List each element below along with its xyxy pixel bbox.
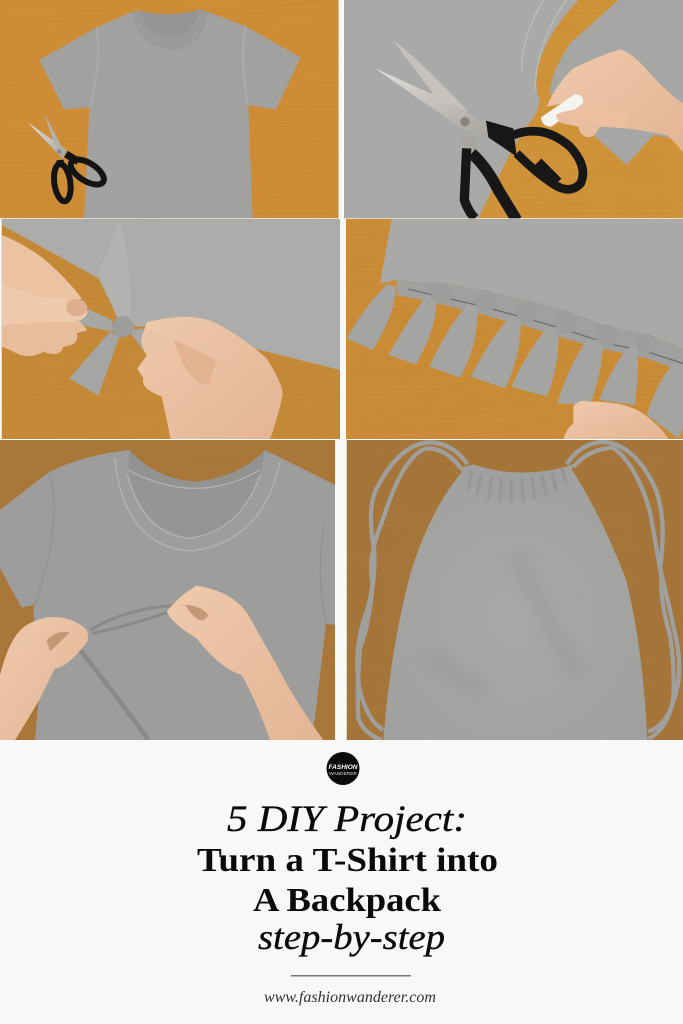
left straps — [357, 442, 467, 740]
website url: www.fashionwanderer.com — [264, 989, 436, 1006]
left hand — [2, 235, 87, 356]
panel: step 5 threading drawstring — [0, 440, 335, 740]
title line: A Backpack: A Backpack — [253, 882, 441, 919]
flat grey t-shirt — [39, 9, 301, 218]
title block — [197, 799, 498, 957]
title line: 5 DIY Project: 5 DIY Project: — [227, 799, 467, 840]
gathered neck — [460, 464, 573, 475]
hand holding chalk — [541, 49, 683, 153]
panel: step 6 finished backpack — [347, 440, 683, 740]
grey fabric body — [380, 219, 683, 348]
right hand — [137, 317, 283, 439]
panel: step 4 row of knots — [346, 219, 683, 439]
grey t-shirt — [0, 450, 335, 740]
cut t-shirt left piece — [344, 0, 578, 218]
scissors — [27, 113, 108, 202]
fringe tails — [347, 284, 683, 438]
knots — [431, 283, 656, 353]
drawstring cord — [80, 606, 178, 740]
brand logo: WANDERER — [329, 771, 357, 777]
knot with tails — [69, 309, 147, 396]
brand logo: FASHION — [329, 764, 358, 771]
right hand — [167, 586, 323, 740]
bag fold shadows — [427, 555, 580, 692]
panel: step 2 cutting with chalk — [344, 0, 683, 220]
scissors — [375, 40, 583, 220]
panel: step 1 t-shirt and scissors — [0, 0, 339, 218]
right straps — [567, 442, 679, 739]
title line: Turn a T-Shirt into: Turn a T-Shirt into — [197, 842, 498, 879]
inner collar — [128, 472, 242, 534]
panel: step 3 tying a knot — [2, 219, 340, 439]
title line: step-by-step: step-by-step — [258, 917, 445, 957]
knotted band — [397, 280, 683, 372]
grey fabric — [2, 219, 340, 370]
brand logo — [326, 752, 360, 785]
cut t-shirt right piece — [550, 0, 683, 165]
hand at tail — [563, 401, 668, 439]
divider rule — [291, 975, 411, 976]
bag body — [383, 467, 647, 740]
left hand — [0, 617, 88, 740]
